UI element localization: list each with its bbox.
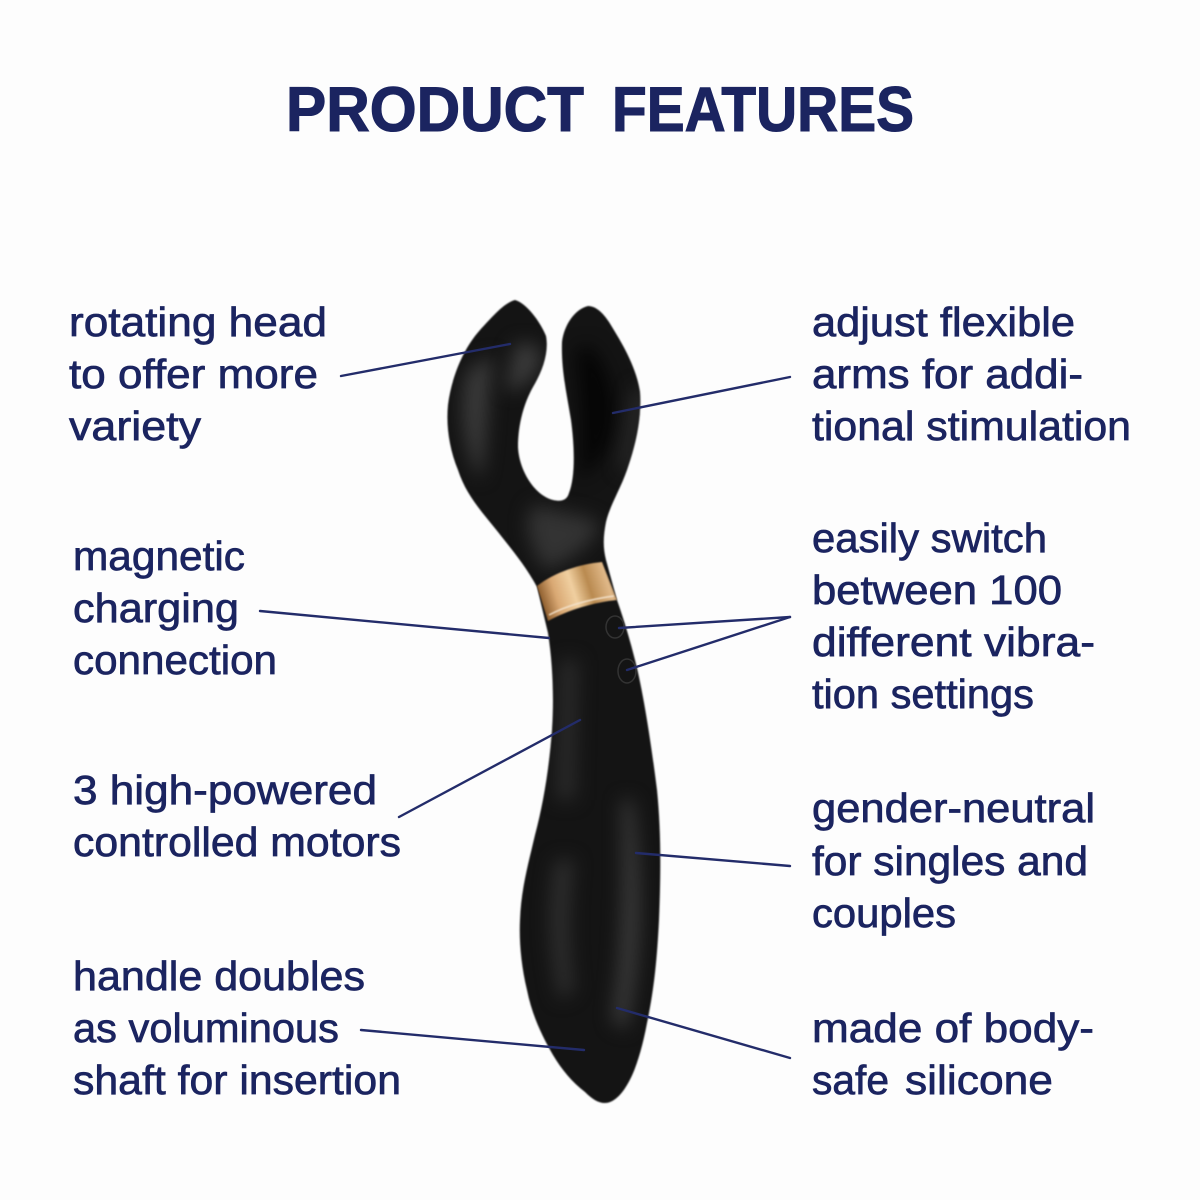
text: handle: as voluminous [73,1005,339,1051]
title [286,75,914,145]
text: vibration settings: easily switch [812,515,1047,561]
text: magnetic charging [73,533,277,683]
text: silicone: silicone [905,1057,1053,1103]
text: vibration settings: tion settings [812,671,1034,717]
text: vibration settings: between 100 [812,567,1062,613]
title: PRODUCT [286,75,584,145]
text: handle: handle doubles [73,953,365,999]
product body [446,299,662,1104]
text: silicone: made of body- [812,1005,1094,1051]
text: flexible arms: adjust flexible [812,299,1075,345]
text: motors [73,767,401,865]
text: flexible arms: arms for addi- [812,351,1083,397]
text: flexible arms [812,299,1131,449]
text: gender-neutral: couples [812,890,956,936]
body highlights [612,800,640,1030]
gold band [537,562,617,621]
control buttons [606,616,636,683]
text: rotating head: to offer more [69,351,318,397]
text: magnetic charging: magnetic [73,533,245,579]
arm highlights [463,355,494,480]
text: motors: controlled motors [73,819,401,865]
text: gender-neutral [812,785,1095,936]
leader lines [260,344,790,1058]
text: rotating head [69,299,327,449]
text: handle: shaft for insertion [73,1057,401,1103]
title: FEATURES [612,75,914,145]
text: flexible arms: tional stimulation [812,403,1131,449]
text: magnetic charging: connection [73,637,277,683]
text: silicone: safe [812,1057,889,1103]
text: rotating head: rotating head [69,299,327,345]
neck highlight [528,505,600,570]
text: silicone [812,1005,1094,1103]
product illustration [446,299,662,1104]
text: gender-neutral: gender-neutral [812,785,1095,831]
text: motors: 3 high-powered [73,767,377,813]
text: magnetic charging: charging [73,585,239,631]
text: handle [73,953,401,1103]
text: gender-neutral: for singles and [812,838,1088,884]
text: vibration settings: different vibra- [812,619,1095,665]
text: rotating head: variety [69,403,202,449]
text: vibration settings [812,515,1095,717]
